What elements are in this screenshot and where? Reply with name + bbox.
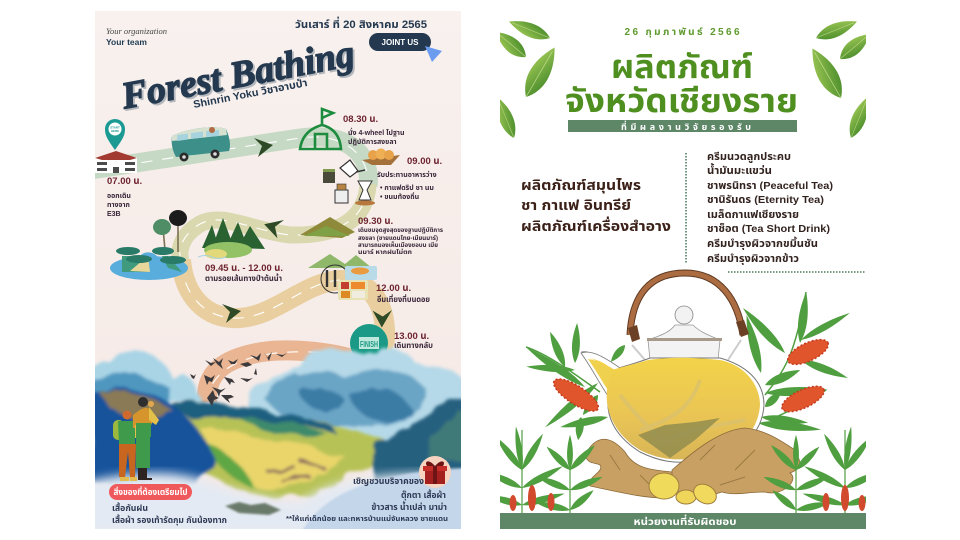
text: 09.30 <box>358 216 443 256</box>
text: 12.00 <box>376 284 430 302</box>
callout: donation <box>286 456 451 523</box>
arrow: route direction 1 <box>254 138 273 157</box>
callout: donation: ตุ๊กตา เสื้อผ้า <box>401 489 446 500</box>
icon: family hikers <box>113 397 159 481</box>
text: 09.00: 09.00 น. <box>407 156 442 167</box>
text: 09.45: ตามรอยเส้นทางป่าต้นน้ำ <box>205 273 282 283</box>
panel: Chiang Rai products poster <box>487 11 880 529</box>
text: 13.00: 13.00 น. <box>394 331 429 342</box>
callout: things to prepare: เสื้อผ้า รองเท้ารัดกุม กันน้องทาก <box>112 514 227 525</box>
icon: lunch set <box>321 265 377 300</box>
text: product list: ครีมบำรุงผิวจากข้าว <box>707 252 799 265</box>
text: 09.30: สามารถมองเห็นเมืองชอบน เมีย <box>358 242 438 249</box>
text: 09.30: 09.30 น. <box>358 216 393 227</box>
icon: river island with palms <box>110 210 188 280</box>
route road <box>90 137 385 402</box>
callout: things to prepare: สิ่งของที่ต้องเตรียมไป <box>114 486 188 497</box>
icon: finish <box>350 324 388 356</box>
text: 12.00: อิ่มเที่ยงที่บนดอย <box>376 294 430 304</box>
illustration: ginger root <box>585 428 800 508</box>
subtitle: Shinrin Yoku วิชาอาบป่า <box>192 77 308 111</box>
organization label <box>106 28 167 45</box>
text: product list: ครีมบำรุงผิวจากขมิ้นชัน <box>707 237 818 250</box>
text: product categories: ผลิตภัณฑ์เครื่องสำอาง <box>521 216 671 234</box>
title <box>566 52 796 112</box>
text: 09.45 <box>205 264 282 281</box>
icon: start pin <box>105 119 125 150</box>
illustration: red ginger flowers <box>549 335 832 417</box>
callout: donation: **ให้แก่เด็กน้อย และทหารบ้านแม่จันหลวง ชายแดน <box>286 515 448 523</box>
text: 08.30: นั่ง 4-wheel ไปฐาน <box>348 127 404 137</box>
callout: things to prepare <box>109 484 227 525</box>
title: Forest Bathing <box>119 34 360 119</box>
text: product list: ครีมนวดลูกประคบ <box>707 151 791 163</box>
title: ผลิตภัณฑ์ <box>611 48 753 85</box>
panel: Forest Bathing poster <box>85 11 470 535</box>
organization label: Your organization <box>106 26 167 36</box>
text: 13.00 <box>394 332 432 348</box>
title: Forest Bathing <box>117 32 358 118</box>
watercolor landscape <box>85 350 470 535</box>
icon: tea leaves right <box>812 21 866 138</box>
text: 09.30: นมาร์ หากฝนไม่ตก <box>358 248 412 256</box>
icon: building <box>95 151 137 173</box>
text: product categories: ชา กาแฟ อินทรีย์ <box>521 197 631 213</box>
text: product categories <box>521 177 671 234</box>
arrow: route direction 4 <box>372 310 392 328</box>
icon: birds <box>190 352 287 406</box>
icon: start pin: HERE <box>111 129 119 133</box>
join button: JOINT US <box>382 38 419 47</box>
text: 09.00: • ขนมท้องถิ่น <box>380 191 419 201</box>
text: 07.00: ทางจาก <box>107 202 130 209</box>
illustration: foreground plants <box>487 426 880 513</box>
callout: donation: ข้าวสาร น้ำเปล่า มาม่า <box>371 501 447 512</box>
icon: van <box>172 127 230 162</box>
illustration: herbal plants behind teapot <box>524 291 852 441</box>
text: product list: เมล็ดกาแฟเชียงราย <box>707 209 799 221</box>
icon: forest <box>198 218 265 259</box>
join button <box>369 33 442 62</box>
icon: bread <box>362 148 400 165</box>
text: 09.00 <box>377 156 442 201</box>
text: product list: น้ำมันมะแขว่น <box>707 163 772 177</box>
footer band <box>500 513 866 529</box>
text: 09.30: เดินชมจุดสูงสุดของฐานปฏิบัติการ <box>358 227 443 234</box>
text: 09.00: รับประทานอาหารว่าง <box>377 171 437 179</box>
text: 08.30 <box>343 114 404 146</box>
icon: camp tent <box>300 109 341 149</box>
footer band: หน่วยงานที่รับผิดชอบ <box>634 514 736 528</box>
text: 09.30: สงขลา (ชายแดนไทย-เมียนมาร์) <box>358 235 438 242</box>
subtitle band <box>568 120 797 132</box>
icon: hills <box>308 254 372 268</box>
text: 09.45: 09.45 น. - 12.00 น. <box>205 263 283 274</box>
subtitle band: ที่มีผลงานวิจัยรองรับ <box>621 120 751 132</box>
organization label: Your team <box>106 37 147 47</box>
text: 12.00: 12.00 น. <box>376 283 411 294</box>
text: product list: ชาพรนิทรา (Peaceful Tea) <box>707 180 833 192</box>
icon: coffee set <box>323 160 375 206</box>
icon: finish: FINISH <box>360 339 378 349</box>
icon: start pin: START <box>110 126 120 130</box>
text: 08.30: 08.30 น. <box>343 114 378 125</box>
arrow: route direction 3 <box>222 304 241 323</box>
callout: donation: เชิญชวนบริจาคของ <box>353 476 424 486</box>
text: 08.30: ปฏิบัติการสงขลา <box>348 138 397 146</box>
date: 26 กุมภาพันธ์ 2566 <box>624 26 740 38</box>
text: 07.00: E3B <box>107 211 121 218</box>
event date: วันเสาร์ ที่ 20 สิงหาคม 2565 <box>295 16 427 31</box>
text: product list: ชาช็อต (Tea Short Drink) <box>707 223 830 235</box>
illustration: teapot <box>581 273 764 462</box>
callout: things to prepare: เสื้อกันฝน <box>112 502 148 513</box>
text: product list <box>707 151 833 265</box>
text: 07.00: 07.00 น. <box>107 176 142 187</box>
text: 07.00 <box>107 178 142 216</box>
text: 07.00: ออกเดิน <box>107 193 131 200</box>
arrow: route direction 2 <box>264 220 284 238</box>
text: 09.00: • กาแฟดริป ชา นม <box>380 185 434 192</box>
text: product categories: ผลิตภัณฑ์สมุนไพร <box>521 177 641 194</box>
text: product list: ชานิรันดร (Eternity Tea) <box>707 194 824 206</box>
title: จังหวัดเชียงราย <box>565 82 798 119</box>
text: 13.00: เดินทางกลับ <box>394 341 433 350</box>
icon: tea leaves left <box>500 21 555 138</box>
icon: mountain <box>300 217 355 238</box>
